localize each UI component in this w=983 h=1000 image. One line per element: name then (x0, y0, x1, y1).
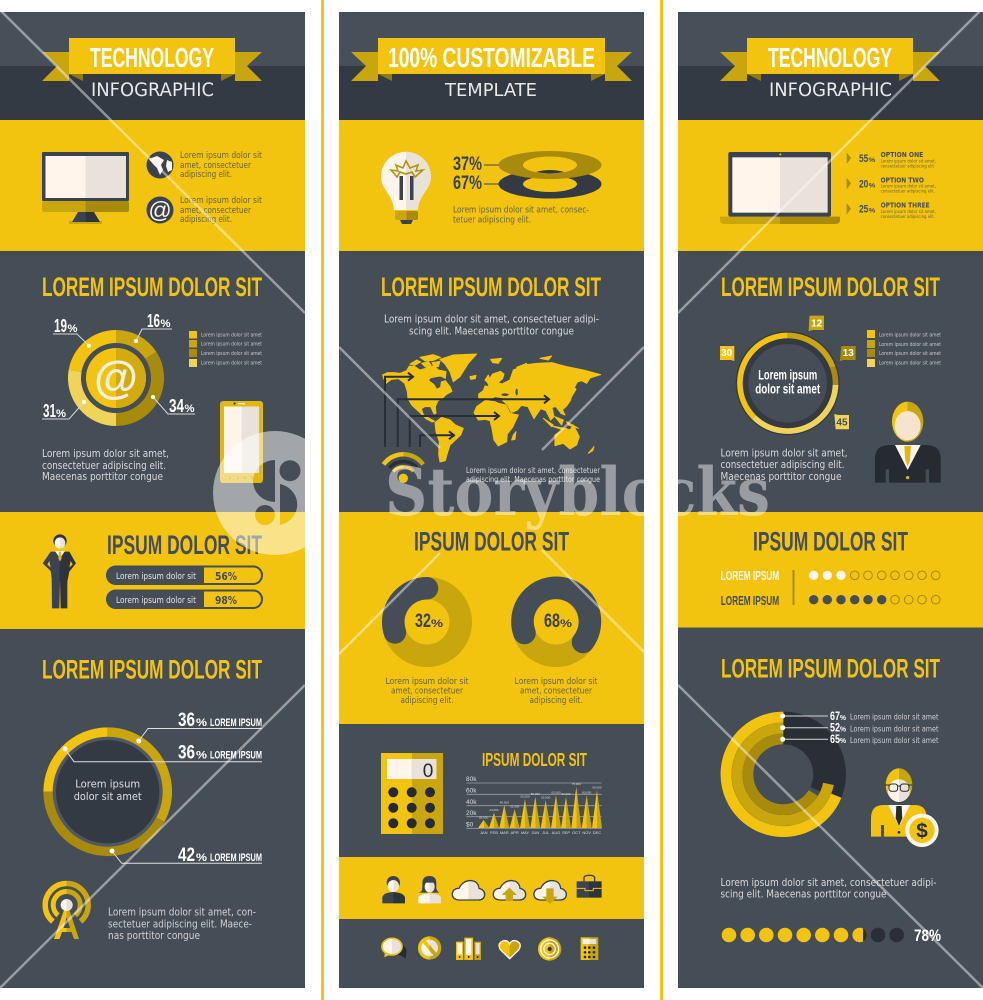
dot rating rows: LOREM IPSUM (721, 568, 779, 583)
callouts: ring chart: % (196, 717, 207, 729)
progress pill: 56 percent: Lorem ipsum dolor sit (116, 571, 196, 582)
legend: Lorem ipsum dolor sit amet (879, 342, 942, 348)
option one: % (869, 157, 876, 164)
icon: businessman bust (875, 402, 941, 483)
option one: Lorem ipsum dolor sit amet, (881, 158, 936, 163)
arrows: map connections (385, 373, 549, 447)
icon: businessman (43, 534, 76, 608)
icon: man (382, 876, 405, 903)
option two: Lorem ipsum dolor sit amet, (881, 184, 936, 189)
callouts: pie percentages: 19 (54, 316, 67, 336)
text block: globe note: amet, consectetuer (180, 160, 251, 171)
panel: left column (0, 12, 305, 988)
dot progress 78 percent (722, 926, 941, 945)
chart: monthly spikes: 60,000 (582, 790, 592, 794)
heading: IPSUM DOLOR SIT (482, 750, 587, 770)
heading: LOREM IPSUM DOLOR SIT (42, 272, 262, 302)
chart: monthly spikes: $5,000 (479, 816, 489, 820)
progress pill: 56 percent: 56% (215, 570, 237, 583)
legend: Lorem ipsum dolor sit amet (879, 332, 942, 338)
heading: LOREM IPSUM DOLOR SIT (42, 654, 262, 684)
chart: monthly spikes: MAY (521, 830, 530, 835)
callouts: pie percentages (42, 311, 195, 421)
callouts: pie percentages: % (184, 403, 195, 415)
chart: monthly spikes: DEC (593, 830, 601, 835)
icon: binders (456, 938, 481, 960)
ring gauge: Lorem ipsum (758, 368, 817, 382)
chart: monthly spikes: 24,000 (489, 808, 499, 812)
callouts: pie percentages: % (68, 323, 78, 335)
world map (383, 354, 601, 462)
chart: monthly spikes: 62,000 (551, 790, 561, 794)
chart: monthly spikes: JUL (542, 830, 550, 835)
callouts: ring chart: % (196, 750, 207, 762)
option three: 25 (859, 204, 868, 216)
text block: donut 1: amet, consectetuer (391, 686, 463, 696)
icon: radio tower (45, 884, 88, 939)
ring gauge: dolor sit amet (755, 382, 821, 396)
icon: small calculator (581, 937, 598, 960)
option three: Lorem ipsum dolor sit amet, (881, 209, 936, 214)
text block: at sign note: amet, consectetuer (180, 205, 251, 216)
icon: cloud (452, 881, 485, 900)
callouts: ring chart: % (196, 852, 207, 864)
text block: map note (466, 465, 600, 484)
chart: monthly spikes: AUG (552, 830, 560, 835)
chart: monthly spikes: APR (511, 830, 519, 835)
legend (189, 331, 263, 367)
ellipse chart: 37% (453, 154, 482, 175)
donut callouts (780, 709, 939, 746)
text block (720, 877, 937, 900)
icon: cloud upload (493, 881, 526, 901)
progress pill: 98 percent: Lorem ipsum dolor sit (116, 595, 196, 606)
icon: speech bubbles (382, 938, 407, 959)
ribbon banner: technology (42, 38, 262, 81)
chart: monthly spikes: 75,000 (572, 782, 581, 786)
donut chart: 68 percent (522, 588, 590, 656)
value tags (720, 316, 856, 429)
donut callouts: Lorem ipsum dolor sit amet (850, 736, 939, 745)
callouts: ring chart: LOREM IPSUM (210, 750, 262, 762)
subtitle: INFOGRAPHIC (769, 79, 892, 101)
donut chart: 68 percent: % (560, 618, 572, 630)
icon: smartphone (220, 401, 263, 483)
icon row: speech ban binders heart target calculator (382, 936, 598, 961)
chart: monthly spikes: 40k (466, 799, 477, 806)
pie chart: at sign (68, 330, 164, 426)
heading: IPSUM DOLOR SIT (107, 530, 262, 560)
legend: Lorem ipsum dolor sit amet (879, 360, 942, 366)
ribbon banner: customizable (351, 38, 632, 81)
text block: donut 2: adipiscing elit. (530, 695, 582, 706)
text block: pie description: Maecenas porttitor congue (42, 471, 163, 483)
chart: monthly spikes: 60k (466, 788, 477, 794)
callouts: pie percentages: 34 (169, 396, 184, 416)
ring gauge (736, 331, 840, 435)
chart: monthly spikes: 40,000 (500, 800, 509, 804)
text block: Lorem ipsum dolor sit amet, consec- (453, 205, 589, 216)
text block: donut 2: amet, consectetuer (520, 686, 592, 696)
chart: monthly spikes: $0 (466, 822, 474, 828)
donut chart: 68 percent: 68 (544, 611, 560, 632)
text block: donut 2 (514, 676, 598, 706)
options list (847, 151, 936, 219)
value tags: 45 (836, 418, 848, 429)
text block: pie description: consectetuer adipiscing elit. (42, 460, 166, 472)
text block (720, 448, 848, 483)
icon: wifi (384, 454, 423, 483)
text block: at sign note: Lorem ipsum dolor sit (180, 195, 262, 206)
ring chart: Lorem ipsum (75, 778, 140, 790)
dot progress 78 percent: 78% (914, 926, 941, 945)
text block: globe note: adipiscing elit. (180, 169, 232, 180)
text block: map intro: scing elit. Maecenas porttitor congue (409, 326, 574, 338)
chart: monthly spikes: 52,000 (541, 796, 551, 800)
chart: monthly spikes: 65,000 (592, 786, 602, 790)
text block: at sign note: adipiscing elit. (180, 214, 232, 225)
text block: donut 2: Lorem ipsum dolor sit (514, 676, 598, 687)
legend (867, 330, 942, 367)
text block: tower description (108, 908, 256, 942)
option one (847, 151, 936, 168)
legend: Lorem ipsum dolor sit amet (879, 351, 942, 357)
icon: at sign: @ (148, 197, 172, 223)
chart: monthly spikes: JAN (480, 830, 488, 835)
subtitle: TEMPLATE (444, 80, 537, 101)
ribbon banner: customizable: 100% CUSTOMIZABLE (388, 42, 595, 73)
chart: monthly spikes: 31,000 (510, 804, 520, 808)
progress pill: 98 percent: 98% (215, 594, 237, 607)
chart: monthly spikes: 55,000 (531, 792, 540, 796)
icon: laptop (720, 152, 840, 224)
chart: monthly spikes (466, 776, 602, 835)
chart: monthly spikes: FEB (490, 830, 498, 835)
text block: globe note (180, 150, 262, 180)
option three: % (869, 208, 876, 215)
donut callouts: Lorem ipsum dolor sit amet (850, 712, 939, 722)
option two: % (869, 182, 876, 189)
callouts: pie percentages: % (56, 408, 66, 420)
value tags: 30 (721, 348, 733, 359)
chart: monthly spikes: 20k (466, 810, 477, 817)
ring chart (43, 727, 172, 856)
donut chart: 32 percent: % (431, 618, 443, 630)
chart: monthly spikes: OCT (572, 830, 581, 835)
icon: woman (418, 876, 441, 903)
text block: Lorem ipsum dolor sit amet, consectetuer adipi- (720, 877, 937, 889)
option two: 20 (859, 178, 868, 190)
text block: map intro (384, 314, 599, 338)
option three (847, 202, 936, 219)
text block: tower description: sectetuer adipiscing elit. Maece- (108, 920, 252, 930)
chart: monthly spikes: 56,000 (561, 792, 571, 796)
chart: monthly spikes: SEP (562, 830, 570, 835)
watermark wordmark: Storyblocks (385, 453, 770, 531)
progress pill: 56 percent (106, 566, 262, 585)
icon: light bulb (381, 152, 431, 224)
dot rating rows: LOREM IPSUM (721, 593, 779, 608)
icon: calculator: 0 (423, 761, 433, 782)
donut callouts: 52 (830, 720, 840, 734)
text block: map note: Lorem ipsum dolor sit amet, consectetuer (466, 465, 600, 475)
callouts: pie percentages: % (160, 318, 171, 330)
callouts: ring chart: 36 (178, 710, 195, 731)
icon: man with dollar (871, 768, 939, 847)
ellipse chart: 67% (453, 173, 482, 194)
option one: OPTION ONE (881, 151, 924, 159)
value tags: 12 (811, 319, 823, 330)
ribbon banner: technology: TECHNOLOGY (768, 42, 892, 73)
ellipse chart (453, 151, 602, 198)
chart: monthly spikes: 50,000 (520, 794, 530, 798)
chart: monthly spikes: 80k (466, 776, 477, 783)
pie chart: at sign: @ (94, 352, 138, 403)
panel: center column (339, 12, 644, 988)
donut callouts: 67 (830, 709, 840, 723)
text block: Maecenas porttitor congue (720, 471, 842, 483)
ring chart: dolor sit amet (74, 790, 142, 803)
legend: Lorem ipsum dolor sit amet (201, 360, 263, 366)
panel: right column (678, 12, 983, 988)
legend: Lorem ipsum dolor sit amet (201, 332, 263, 338)
donut callouts: 65 (830, 732, 840, 746)
donut callouts: % (840, 726, 847, 734)
progress pill: 98 percent (106, 590, 262, 609)
text block: tower description: nas porttitor congue (108, 931, 200, 942)
heading: LOREM IPSUM DOLOR SIT (381, 272, 601, 302)
watermark logo (213, 431, 337, 555)
icon: briefcase (577, 875, 602, 898)
heading: IPSUM DOLOR SIT (414, 526, 569, 556)
text block: Lorem ipsum dolor sit amet, (720, 448, 848, 460)
text block: map note: adipiscing elit. Maecenas porttitor congue (466, 474, 600, 484)
option three: consectetuer adipiscing elit. (881, 214, 935, 219)
text block: consectetuer adipiscing elit. (720, 459, 844, 471)
callouts: pie percentages: 31 (43, 401, 56, 421)
text block: donut 1 (386, 676, 469, 706)
icon: cloud download (534, 881, 566, 904)
text block: pie description: Lorem ipsum dolor sit amet, (42, 448, 169, 460)
legend: Lorem ipsum dolor sit amet (201, 351, 263, 357)
donut callouts: Lorem ipsum dolor sit amet (850, 724, 939, 734)
callouts: ring chart: 36 (178, 742, 195, 764)
text block: donut 1: Lorem ipsum dolor sit (386, 676, 469, 687)
icon: heart (499, 941, 520, 959)
text block: pie description (42, 448, 169, 483)
text block: tower description: Lorem ipsum dolor sit amet, con- (108, 908, 256, 919)
callouts: ring chart (62, 710, 262, 866)
value tags: 13 (843, 348, 854, 359)
donut callouts: % (840, 738, 847, 745)
icon: globe (146, 152, 174, 178)
icon: target (538, 937, 561, 961)
text block: map intro: Lorem ipsum dolor sit amet, consectetuer adipi- (384, 314, 599, 326)
icon: calculator (381, 753, 443, 834)
multi-ring donut chart (726, 717, 836, 832)
donut callouts: % (840, 715, 847, 722)
ribbon banner: technology (720, 38, 940, 81)
callouts: pie percentages: 16 (147, 311, 160, 331)
dot rating rows (721, 568, 940, 608)
text block: tetuer adipiscing elit. (453, 214, 531, 226)
chart: monthly spikes: MAR (500, 830, 509, 835)
option one: consectetuer adipiscing elit (881, 163, 934, 168)
callouts: ring chart: LOREM IPSUM (210, 717, 262, 729)
icon row: people clouds briefcase (382, 875, 602, 904)
chart: monthly spikes: NOV (582, 830, 591, 835)
option one: 55 (859, 153, 868, 165)
icon: man with dollar: $ (916, 820, 928, 843)
text block: globe note: Lorem ipsum dolor sit (180, 150, 262, 161)
text block: at sign note (180, 195, 262, 225)
callouts: ring chart: LOREM IPSUM (210, 852, 262, 864)
ribbon banner: technology: TECHNOLOGY (90, 42, 214, 73)
option two: OPTION TWO (881, 176, 924, 184)
option three: OPTION THREE (881, 202, 930, 210)
icon: ban sign (418, 936, 441, 960)
donut chart: 32 percent: 32 (415, 611, 431, 632)
option two: consectetuer adipiscing elit. (881, 189, 935, 194)
text block: donut 1: adipiscing elit. (400, 695, 454, 706)
chart: monthly spikes: JUN (531, 830, 539, 835)
donut chart: 32 percent (393, 588, 461, 656)
option two (847, 176, 936, 194)
legend: Lorem ipsum dolor sit amet (201, 342, 263, 348)
text block: scing elit. Maecenas porttitor congue (720, 888, 886, 900)
text block (453, 205, 589, 226)
callouts: ring chart: 42 (178, 845, 195, 866)
icon: desktop monitor (42, 152, 129, 224)
subtitle: INFOGRAPHIC (91, 79, 214, 101)
